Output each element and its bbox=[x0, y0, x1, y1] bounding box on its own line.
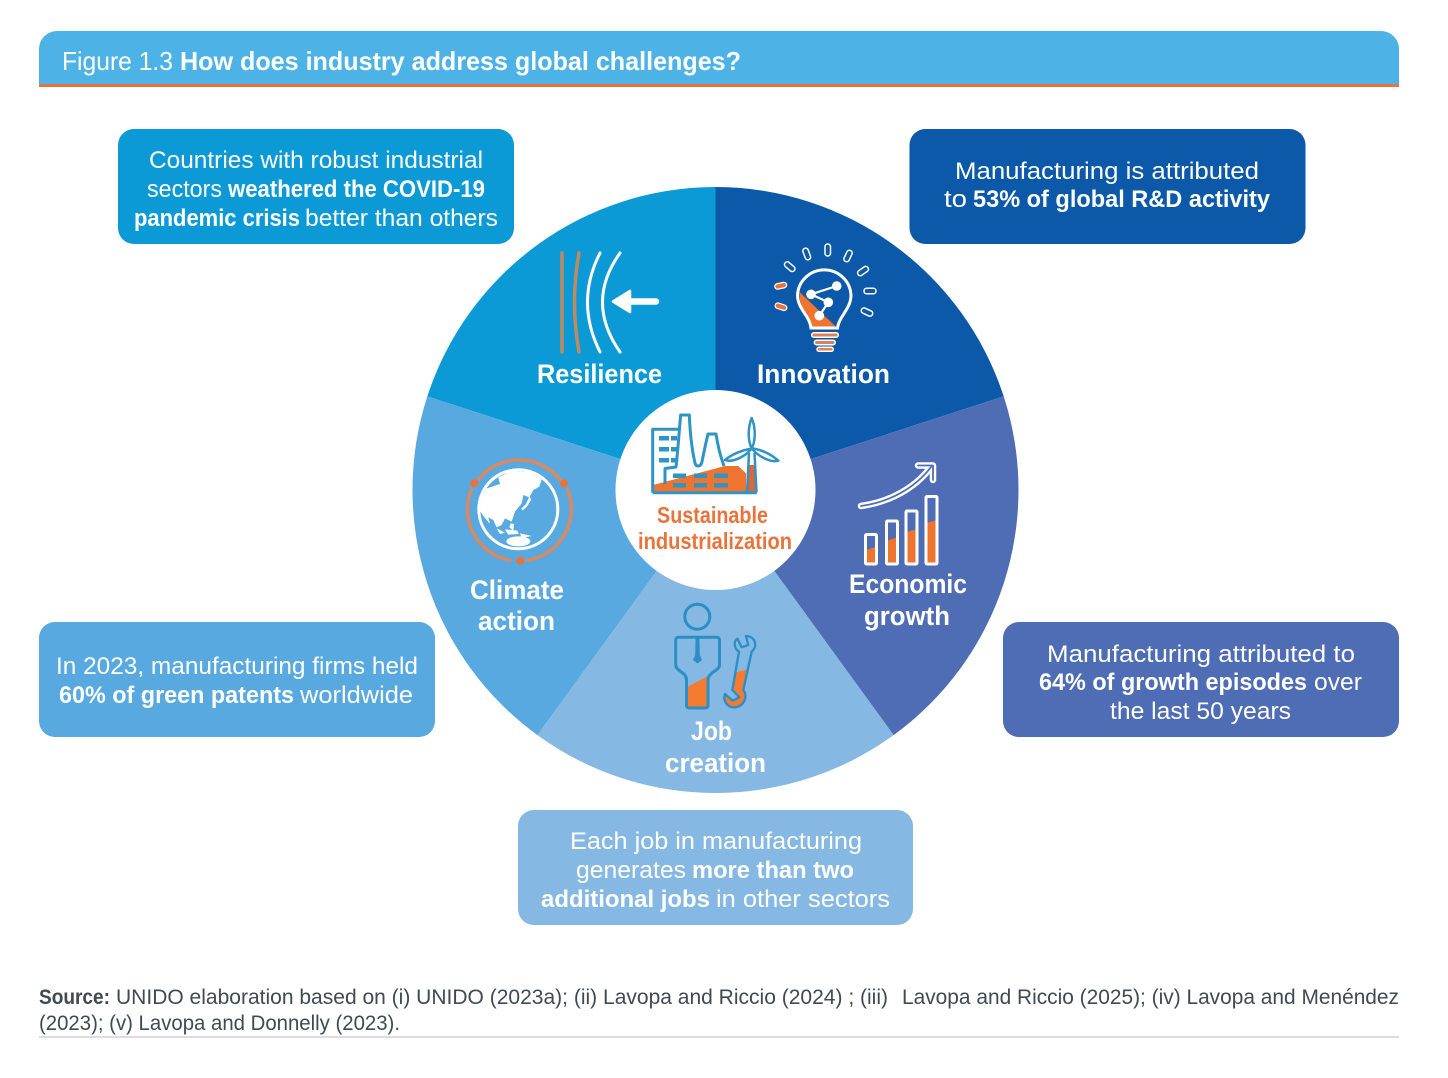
wheel of five segments bbox=[412, 187, 1019, 793]
callout: innovation: Manufacturing is attributed bbox=[955, 158, 1259, 185]
segment: job creation bbox=[537, 490, 894, 793]
segment: resilience bbox=[427, 187, 716, 490]
icon: worker and wrench bbox=[676, 604, 755, 708]
callout: resilience: Countries with robust industrial bbox=[149, 147, 483, 174]
label: sustainable industrialization: industrialization bbox=[638, 528, 792, 554]
callout: resilience: better than others bbox=[305, 205, 498, 232]
callout: resilience: pandemic crisis bbox=[134, 205, 300, 232]
source note: Lavopa and Riccio (2025); (iv) Lavopa and Menéndez bbox=[902, 986, 1399, 1009]
callout: innovation: 53% of global R&D activity bbox=[973, 186, 1271, 213]
callout: economic growth: the last 50 years bbox=[1110, 698, 1291, 725]
source note bbox=[39, 986, 1399, 1035]
callout: innovation: to bbox=[944, 186, 967, 213]
label: economic growth: growth bbox=[864, 601, 950, 631]
callout: resilience: weathered the COVID-19 bbox=[227, 176, 485, 203]
callout: resilience: sectors bbox=[147, 176, 222, 203]
callout: economic growth: Manufacturing attributed to bbox=[1047, 641, 1355, 668]
label: job creation: creation bbox=[665, 748, 766, 778]
icon: light bulb bbox=[774, 244, 876, 351]
label: climate action bbox=[470, 575, 564, 636]
label: economic growth: Economic bbox=[849, 569, 967, 599]
icon: factory and wind turbine bbox=[653, 415, 778, 493]
callout: climate action: worldwide bbox=[299, 682, 413, 709]
label: economic growth bbox=[849, 569, 967, 631]
icon: bar chart with rising arrow bbox=[861, 466, 937, 564]
callout: job creation: generates bbox=[576, 857, 686, 884]
icon: resilience waves and arrow bbox=[562, 253, 656, 352]
source note: (2023); (v) Lavopa and Donnelly (2023). bbox=[39, 1012, 400, 1035]
callout: resilience bbox=[118, 129, 514, 244]
header bar with title: Figure 1.3 bbox=[62, 46, 173, 76]
segment: innovation bbox=[716, 187, 1004, 490]
label: climate action: action bbox=[478, 606, 555, 636]
segment: climate action bbox=[412, 396, 716, 735]
label: job creation bbox=[665, 716, 766, 778]
segment: economic growth bbox=[716, 396, 1019, 735]
label: sustainable industrialization: Sustainable bbox=[657, 502, 768, 528]
callout: climate action: In 2023, manufacturing firms held bbox=[56, 653, 418, 680]
label: innovation: Innovation bbox=[757, 359, 890, 389]
callout: economic growth: 64% of growth episodes bbox=[1039, 669, 1307, 696]
center circle bbox=[616, 390, 816, 590]
callout: job creation: more than two bbox=[692, 857, 854, 884]
callout: climate action: 60% of green patents bbox=[59, 682, 294, 709]
callout: economic growth: over bbox=[1314, 669, 1362, 696]
label: climate action: Climate bbox=[470, 575, 564, 605]
icon: globe with orange ring bbox=[467, 460, 571, 565]
callout: economic growth bbox=[1003, 622, 1399, 737]
header bar with title: How does industry address global challenges? bbox=[180, 46, 741, 76]
header bar with title bbox=[39, 31, 1399, 87]
source note: Source: bbox=[39, 986, 110, 1009]
callout: job creation: in other sectors bbox=[716, 886, 890, 913]
source note: UNIDO elaboration based on (i) UNIDO (2023a); (ii) Lavopa and Riccio (2024) ; (iii) bbox=[116, 986, 888, 1009]
label: job creation: Job bbox=[691, 716, 732, 746]
label: sustainable industrialization bbox=[638, 502, 792, 554]
callout: climate action bbox=[39, 622, 435, 737]
callout: job creation: Each job in manufacturing bbox=[570, 828, 862, 855]
callout: job creation: additional jobs bbox=[541, 886, 710, 913]
callout: innovation bbox=[910, 129, 1306, 244]
callout: job creation bbox=[518, 810, 913, 925]
label: resilience: Resilience bbox=[537, 359, 662, 389]
